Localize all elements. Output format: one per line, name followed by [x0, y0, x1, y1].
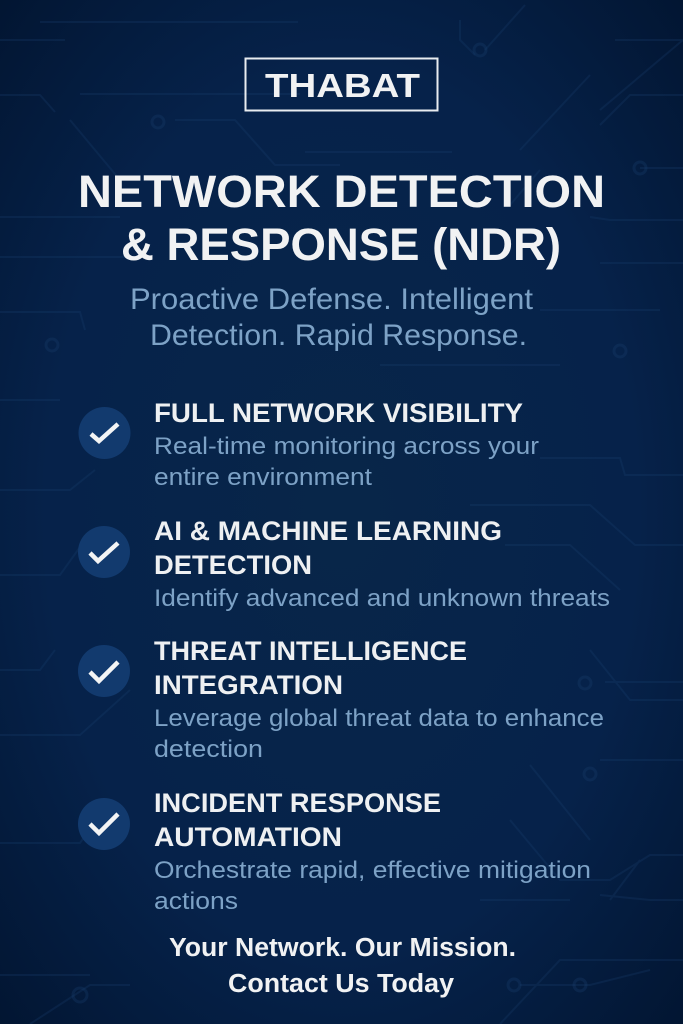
- title: [78, 166, 605, 270]
- icon: check badge: [78, 645, 130, 697]
- item description: entire environment: [154, 464, 372, 491]
- item heading: THREAT INTELLIGENCE: [154, 636, 467, 666]
- footer call to action: [169, 934, 516, 998]
- icon: check badge: [78, 407, 130, 459]
- icon: check badge: [78, 798, 130, 850]
- subtitle: Detection. Rapid Response.: [150, 319, 527, 352]
- item heading: [154, 516, 502, 580]
- subtitle: [130, 283, 534, 352]
- item description: Orchestrate rapid, effective mitigation: [154, 857, 591, 884]
- item description: Leverage global threat data to enhance: [154, 705, 604, 732]
- item description: actions: [154, 888, 238, 915]
- item description: Identify advanced and unknown threats: [154, 585, 610, 612]
- item heading: [154, 636, 467, 700]
- item heading: AUTOMATION: [154, 822, 342, 852]
- logo: THABAT: THABAT: [265, 68, 421, 105]
- subtitle: Proactive Defense. Intelligent: [130, 283, 534, 316]
- item description: Real-time monitoring across your: [154, 433, 539, 460]
- title: & RESPONSE (NDR): [121, 219, 561, 270]
- item heading: [154, 788, 441, 852]
- item: incident response automation: [78, 788, 591, 915]
- icon: check badge: [78, 526, 130, 578]
- footer call to action: Contact Us Today: [228, 970, 455, 998]
- item heading: DETECTION: [154, 550, 312, 580]
- item: full network visibility: [78, 398, 539, 491]
- item heading: AI & MACHINE LEARNING: [154, 516, 502, 546]
- logo: THABAT: [246, 58, 438, 110]
- title: NETWORK DETECTION: [78, 166, 605, 217]
- item: AI and machine learning detection: [78, 516, 610, 612]
- item heading: INCIDENT RESPONSE: [154, 788, 441, 818]
- item description: [154, 705, 604, 763]
- item heading: FULL NETWORK VISIBILITY: [154, 398, 523, 428]
- item description: detection: [154, 736, 263, 763]
- item: threat intelligence integration: [78, 636, 604, 763]
- footer call to action: Your Network. Our Mission.: [169, 934, 516, 962]
- item heading: INTEGRATION: [154, 670, 343, 700]
- item description: [154, 433, 539, 491]
- item description: [154, 857, 591, 915]
